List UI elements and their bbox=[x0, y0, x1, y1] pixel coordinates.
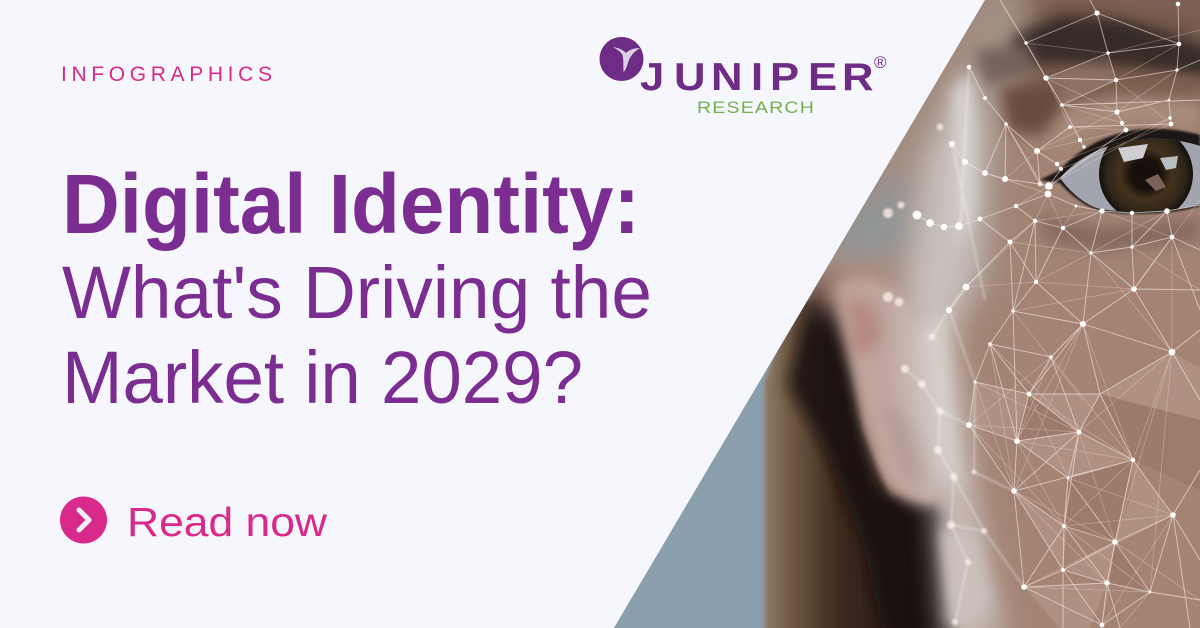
title line 2: What's Driving the bbox=[62, 251, 652, 334]
skin tones bbox=[1016, 0, 1200, 110]
white sheen bbox=[905, 70, 1005, 628]
face photo panel bbox=[600, 0, 1200, 628]
upper cheek and temple bbox=[812, 0, 1030, 320]
title line 3: Market in 2029? bbox=[62, 336, 583, 419]
mesh nodes blurred bbox=[883, 124, 987, 625]
face mesh lines bbox=[917, 0, 1200, 628]
category label: INFOGRAPHICS bbox=[61, 63, 272, 86]
hair bbox=[765, 300, 955, 628]
logo subtitle: RESEARCH bbox=[697, 98, 815, 117]
registered mark: ® bbox=[874, 53, 887, 72]
secondary mesh lines bbox=[966, 30, 1200, 628]
eye bbox=[1040, 127, 1200, 221]
mesh nodes sharp bbox=[913, 2, 1181, 627]
read now label: Read now bbox=[127, 499, 327, 545]
logo: Juniper Research bbox=[600, 37, 887, 117]
title line 1: Digital Identity: bbox=[62, 157, 640, 251]
darker facets bbox=[1102, 394, 1197, 488]
icon: chevron button bbox=[60, 496, 107, 544]
logo emblem bbox=[600, 37, 644, 81]
skin facets bbox=[969, 53, 1200, 628]
call to action bbox=[60, 496, 327, 545]
eyebrow bbox=[975, 0, 1200, 85]
logo wordmark: JUNIPER bbox=[640, 55, 874, 98]
backdrop bbox=[600, 300, 810, 628]
blurred outer mesh lines bbox=[905, 67, 1024, 622]
eye socket and lid bbox=[1000, 72, 1200, 252]
dark hair shadow bbox=[788, 270, 958, 628]
title bbox=[62, 157, 652, 419]
ear bbox=[837, 279, 944, 505]
